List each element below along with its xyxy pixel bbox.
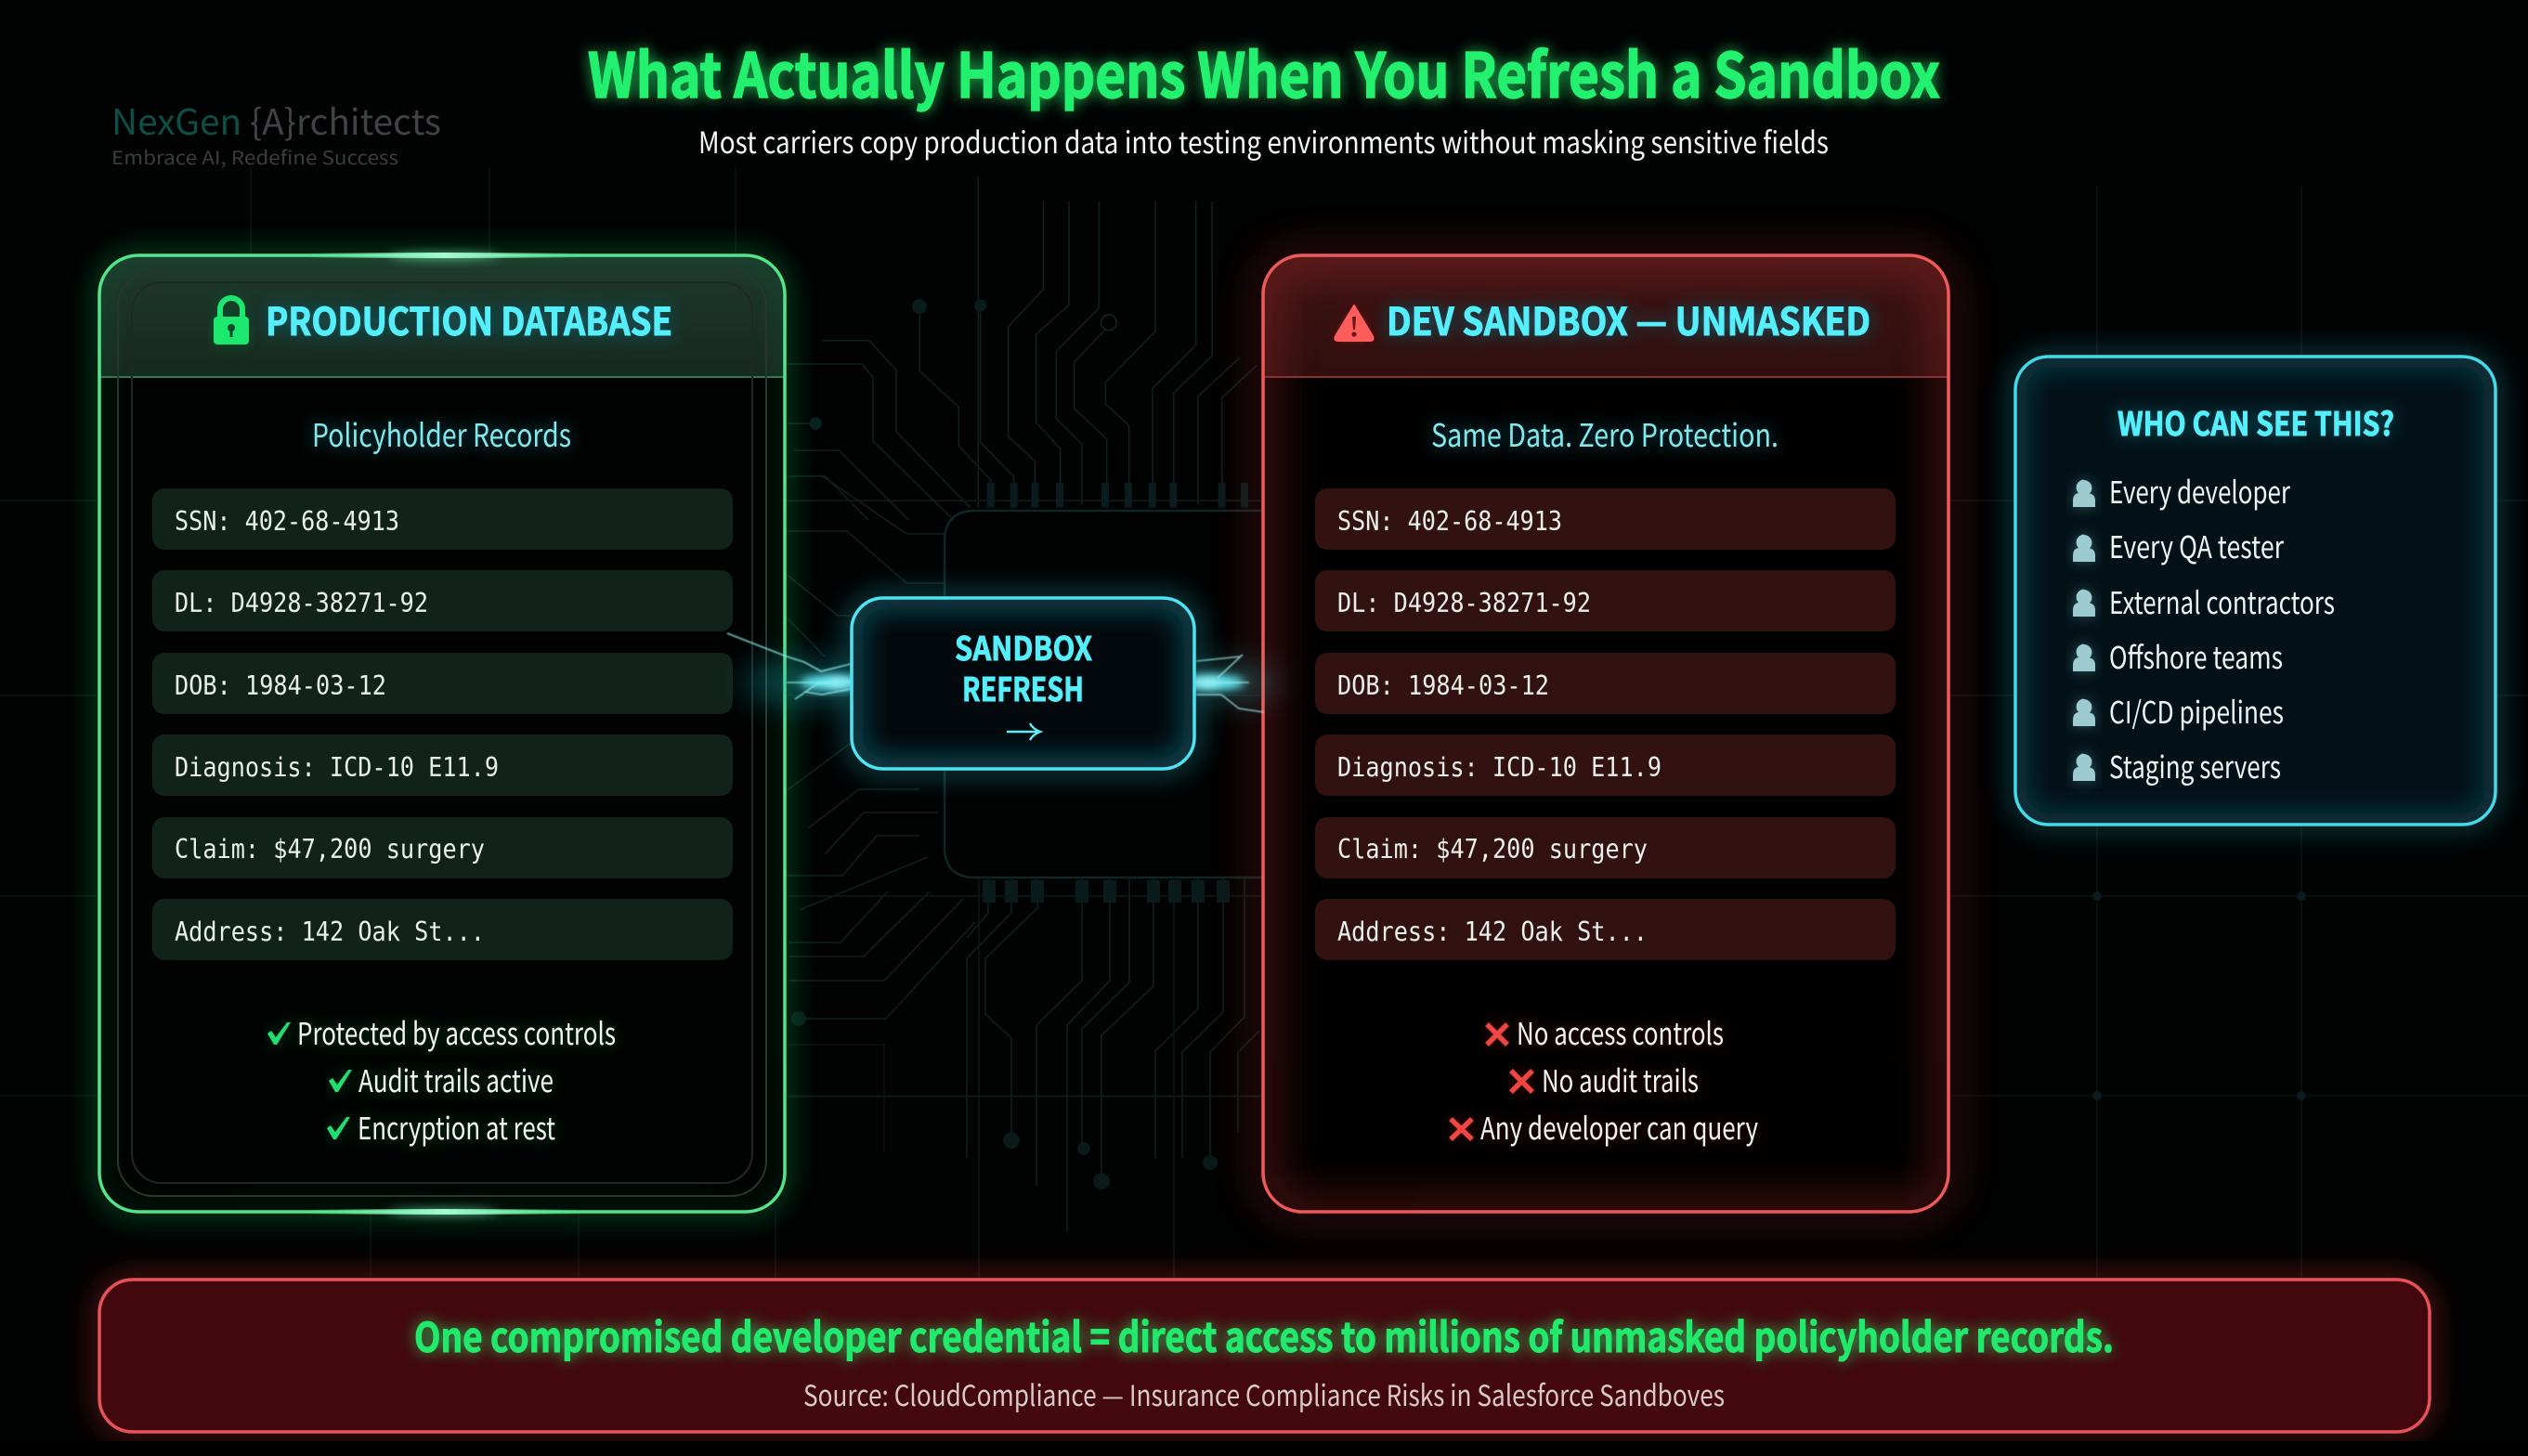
label: sandbox refresh: [955, 623, 1092, 711]
data rows: production: [152, 488, 733, 960]
panel: sandbox refresh: [852, 598, 1194, 769]
data rows: production: Claim: $47,200 surgery: [175, 834, 485, 864]
callout headline: One compromised developer credential = direct access to millions of unmasked policyholder records.: [414, 1305, 2114, 1364]
list: protections: Audit trails active: [358, 1057, 554, 1101]
background grid: [0, 167, 2528, 1281]
circuit board traces: [785, 176, 1263, 1280]
list: protections: Protected by access controls: [297, 1009, 616, 1054]
list: people with access: External contractors: [2109, 578, 2335, 623]
list: protections: Encryption at rest: [358, 1104, 555, 1149]
list: people with access: Offshore teams: [2109, 633, 2283, 678]
data rows: sandbox: [1315, 488, 1896, 960]
subheading: policyholder records: Policyholder Records: [312, 410, 571, 456]
logo: NexGen Architects: [111, 94, 441, 170]
list: people with access: Every QA tester: [2109, 523, 2284, 567]
heading: dev sandbox unmasked: DEV SANDBOX — UNMASKED: [1387, 291, 1870, 346]
list: missing protections: No access controls: [1517, 1009, 1724, 1054]
data rows: sandbox: Diagnosis: ICD-10 E11.9: [1337, 752, 1661, 783]
callout: bottom banner: [99, 1280, 2430, 1432]
logo: NexGen Architects: Embrace AI, Redefine Success: [111, 143, 398, 170]
list: people with access: CI/CD pipelines: [2109, 688, 2284, 733]
heading: who can see this: WHO CAN SEE THIS?: [2118, 398, 2394, 446]
data rows: sandbox: Address: 142 Oak St...: [1337, 916, 1648, 947]
title: What Actually Happens When You Refresh a Sandbox: [588, 27, 1940, 116]
data rows: sandbox: DOB: 1984-03-12: [1337, 670, 1549, 701]
data rows: production: DL: D4928-38271-92: [175, 588, 428, 618]
list: people with access: Staging servers: [2109, 743, 2281, 787]
list: missing protections: [1451, 1009, 1758, 1149]
list: missing protections: Any developer can query: [1480, 1104, 1758, 1149]
list: people with access: [2073, 468, 2335, 787]
panel: dev sandbox unmasked: [1263, 255, 1948, 1212]
data rows: production: Address: 142 Oak St...: [175, 916, 485, 947]
panel: production database: [99, 253, 785, 1216]
list: missing protections: No audit trails: [1542, 1057, 1699, 1101]
arrow: right: [1007, 723, 1040, 740]
logo: NexGen Architects: NexGen {A}rchitects: [111, 94, 441, 145]
arrow: energy sparks into sandbox refresh: [727, 633, 1277, 712]
label: sandbox refresh: REFRESH: [962, 664, 1084, 711]
list: protections: [267, 1009, 616, 1149]
list: people with access: Every developer: [2109, 468, 2290, 513]
icon: warning triangle: [1335, 306, 1374, 341]
data rows: production: DOB: 1984-03-12: [175, 670, 386, 701]
subtitle: Most carriers copy production data into testing environments without masking sensitive fields: [698, 120, 1829, 162]
data rows: production: SSN: 402-68-4913: [175, 506, 399, 537]
source line: Source: CloudCompliance — Insurance Compliance Risks in Salesforce Sandboves: [803, 1372, 1725, 1414]
heading: production database: PRODUCTION DATABASE: [266, 291, 672, 346]
label: sandbox refresh: SANDBOX: [955, 623, 1092, 670]
icon: lock: [214, 298, 249, 344]
panel: who can see this: [2015, 357, 2495, 825]
data rows: production: Diagnosis: ICD-10 E11.9: [175, 752, 499, 783]
data rows: sandbox: Claim: $47,200 surgery: [1337, 834, 1648, 864]
subheading: same data zero protection: Same Data. Zero Protection.: [1431, 410, 1779, 456]
data rows: sandbox: DL: D4928-38271-92: [1337, 588, 1591, 618]
data rows: sandbox: SSN: 402-68-4913: [1337, 506, 1562, 537]
